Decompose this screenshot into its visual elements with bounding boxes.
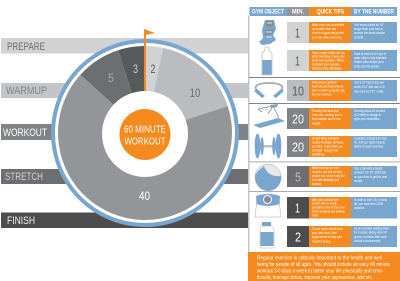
panel divider — [248, 16, 250, 253]
row 5 — [287, 136, 397, 157]
row 8: your hard work, take — [312, 231, 337, 235]
row 3: Great way to optimize — [312, 80, 337, 84]
value labels — [108, 62, 201, 203]
row 7: perfect time to weigh — [312, 202, 337, 206]
row 1 — [287, 22, 397, 43]
wedge: stretch 5 — [80, 50, 145, 133]
icon: scale — [255, 194, 281, 217]
row 5: for until you reach muscle — [354, 140, 385, 144]
row 4: weight. — [312, 121, 321, 125]
band: workout — [1, 124, 249, 140]
row 3: 10 — [292, 84, 304, 98]
band: warmup: WARMUP — [6, 85, 47, 97]
icon: jump rope — [254, 83, 284, 98]
row 6 — [287, 166, 397, 187]
row 6: While working your core — [312, 166, 339, 170]
row 5: muscle flexibility, firmness, — [312, 140, 344, 144]
flag — [144, 29, 155, 91]
row 5: 20 — [292, 140, 304, 154]
row 7: After your workout is the — [312, 198, 339, 202]
row 7: body's progress and develop — [312, 210, 345, 214]
row 4: 20 — [292, 112, 304, 126]
row 6: results. — [354, 179, 363, 183]
icon: shoe — [259, 20, 276, 45]
row 8 — [287, 226, 397, 247]
row 1: longer than your foot to — [354, 27, 383, 31]
row 8: 2 — [295, 230, 301, 244]
row 7: fat, you must burn 3,500 — [354, 202, 383, 206]
row 6: muscles, you can not only — [312, 170, 342, 174]
row 3: heart rate and body tempera- — [312, 84, 345, 88]
value labels: 3 — [133, 62, 138, 76]
row 2: 1 — [295, 54, 300, 68]
inner white circle — [102, 91, 188, 177]
row 3: under 5'10" and use a 10' — [354, 85, 385, 89]
row 3: ture in order to prepare you — [312, 88, 345, 92]
row 5: strength, energy and — [312, 148, 338, 152]
row 7 — [287, 197, 397, 218]
row 8: To see better results from — [312, 227, 343, 231]
center title — [124, 124, 166, 147]
row 8: muscles fueled. — [312, 239, 331, 243]
row 6: Use a ball with a height — [354, 166, 382, 170]
row 8: supplements to keep your — [312, 235, 343, 239]
callout: footer note — [248, 252, 400, 281]
row 3 — [287, 80, 397, 101]
wedge: prepare 2 — [145, 46, 163, 133]
donut chart: 60 minute workout — [51, 29, 239, 227]
row 6: increase flexibility and — [312, 178, 339, 182]
row 5: failure in each exercise. — [354, 145, 384, 149]
row 8: As an essential building block — [354, 226, 389, 230]
wedge: finish 3 — [118, 46, 145, 133]
row 5: Complete at least 8-10 reps — [354, 136, 387, 140]
row 7: In order to lose 1 lb. of body — [354, 198, 387, 202]
row 2: Water also helps your — [354, 60, 385, 64]
row 3: for your workout. — [312, 92, 332, 96]
icon: supplement jar — [260, 222, 274, 248]
row 1: your feet while exercising. — [312, 35, 342, 39]
row 8: for muscles, taking about 40 — [354, 231, 387, 235]
center title: 60 MINUTE — [124, 124, 166, 136]
row 4: spike your metabolism. — [354, 117, 380, 121]
row 5: and tone. It also gives you — [312, 144, 343, 148]
row 8: workout is recommended. — [354, 239, 381, 243]
row 4: heart rate, causing you to — [312, 113, 342, 117]
icon: treadmill — [253, 104, 285, 128]
icon: exercise ball — [255, 164, 281, 191]
band: finish: FINISH — [7, 215, 35, 227]
row 4: burn calories and to lose — [312, 117, 341, 121]
row 4 — [287, 108, 397, 129]
row 2: hydrated your muscles — [312, 62, 340, 66]
row 1: shoes to support and protect — [312, 31, 344, 35]
row 2: Drink at least 16-32 cups of — [354, 52, 386, 56]
wedge: workout 40 — [58, 75, 232, 220]
row 1: Wear loose and comfortable — [312, 23, 344, 27]
value labels: 2 — [150, 62, 156, 76]
row 6: stretch your whole body, but — [312, 174, 345, 178]
row 3: rope if you are 5'11" or taller. — [354, 89, 384, 93]
row 1: 1 — [295, 26, 300, 40]
row 4: Running about 20 minutes — [354, 109, 385, 113]
row 5: Weight lifting maintains — [312, 136, 339, 140]
row 2: body well hydrated. When — [312, 59, 344, 63]
section lines — [249, 77, 400, 192]
row 4: Running increases your — [312, 109, 340, 113]
center title: WORKOUT — [124, 135, 166, 147]
row 4: (3.2 miles) is enough to — [354, 113, 381, 117]
band: prepare: PREPARE — [7, 41, 45, 53]
row 1: workout attire. Wear safe — [312, 27, 336, 31]
center orange circle — [120, 109, 170, 160]
row 7: 1 — [295, 200, 300, 216]
row 5: confidence. — [312, 152, 325, 156]
table header: QUICK TIPS — [317, 9, 344, 16]
band: stretch — [1, 169, 249, 184]
table header: GYM OBJECT — [252, 9, 284, 16]
row 6: between 18"-30" and focus — [354, 171, 386, 175]
row 8: grams of protein after each — [354, 235, 387, 239]
row 1: provide the most comfort — [354, 31, 385, 35]
row 7: calories. — [354, 206, 365, 210]
row 2: function more effectively. — [312, 66, 342, 70]
table header — [250, 7, 397, 16]
wedge: warmup 10 — [145, 48, 228, 133]
band: workout: WORKOUT — [3, 127, 47, 139]
row 2 — [287, 50, 397, 71]
value labels: 5 — [108, 71, 114, 85]
table header: MIN. — [292, 9, 304, 16]
row 2: Carry a water bottle with you — [312, 51, 345, 55]
row 1: Your shoes should be 1/2" — [354, 23, 385, 27]
row 1: and fit. — [354, 35, 364, 39]
row 2: water daily to stay hydrated. — [354, 56, 387, 60]
value labels: 10 — [190, 86, 201, 100]
band: finish — [1, 212, 249, 228]
row 6: 5 — [295, 170, 301, 184]
band: prepare — [1, 38, 249, 54]
row 2: body shed fat quicker. — [354, 64, 380, 68]
row 7: yourself in order to track your — [312, 206, 346, 210]
row 6: balance. — [312, 182, 322, 186]
band: warmup — [1, 83, 249, 98]
icon: water bottle — [262, 47, 272, 75]
band: stretch: STRETCH — [5, 171, 43, 183]
row 7: more. — [312, 213, 319, 217]
row 6: on your form to get the best — [354, 175, 387, 179]
row 2: while exercising to keep your — [312, 55, 346, 59]
icon: dumbbell — [255, 134, 281, 158]
value labels: 40 — [139, 189, 150, 203]
row 3: Use a 10' rope if you are — [354, 80, 384, 84]
